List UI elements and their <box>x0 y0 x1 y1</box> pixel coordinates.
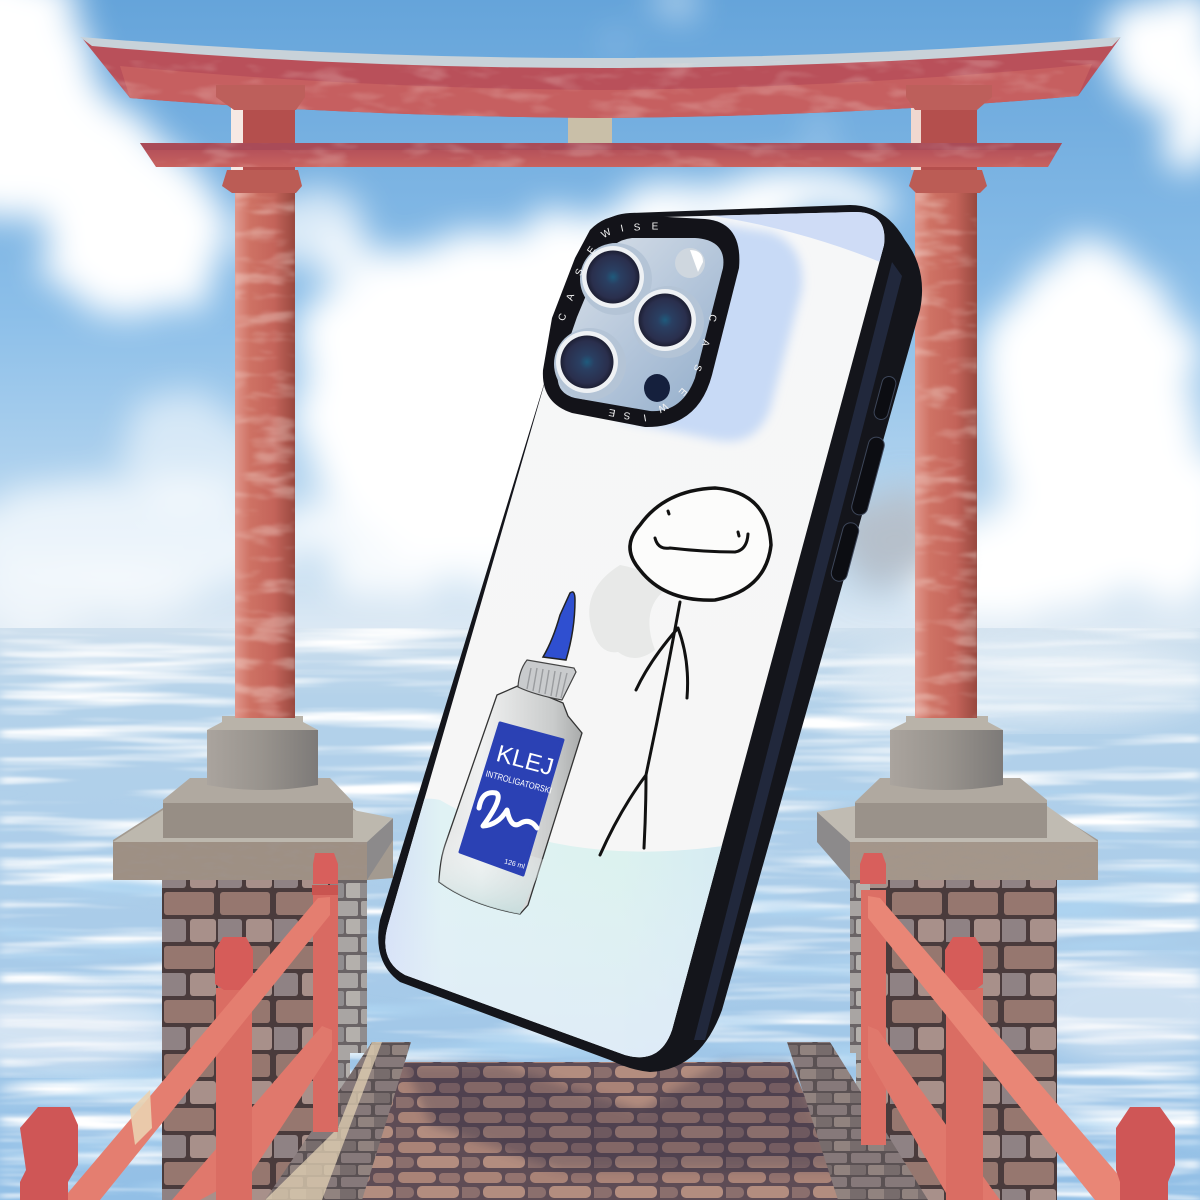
lower beam <box>140 143 1062 167</box>
lower rail <box>172 1026 332 1200</box>
side reflection <box>694 262 902 1040</box>
camera ring <box>543 215 739 427</box>
central strut <box>568 105 612 143</box>
torii gate <box>80 37 1121 718</box>
camera glass <box>558 238 723 411</box>
right brick wall <box>868 878 1057 1200</box>
right railing <box>860 853 1175 1200</box>
phone case <box>360 205 922 1080</box>
stone walkway <box>265 1042 928 1200</box>
brand text top left: W <box>600 226 614 241</box>
pillar brackets <box>216 85 305 110</box>
squiggle <box>479 793 537 828</box>
brand text top left: E <box>585 244 598 256</box>
camera module <box>543 215 739 427</box>
sea <box>0 628 1200 1200</box>
brand text bottom right: E <box>676 385 689 398</box>
label text: INTROLIGATORSKI <box>485 768 553 796</box>
cap <box>518 660 576 700</box>
right drum <box>890 730 1003 790</box>
sky <box>0 0 1200 630</box>
left curb <box>265 1042 411 1200</box>
right stone pier <box>817 716 1098 1200</box>
phone shadow on cobbles <box>405 1062 840 1170</box>
lens right <box>632 286 704 358</box>
middle post <box>946 988 983 1200</box>
brand text bottom right: I <box>643 411 647 423</box>
lower pastel area <box>385 798 722 1058</box>
right ring <box>890 716 1003 730</box>
body and limbs <box>600 602 688 855</box>
right plinth <box>855 778 1047 838</box>
face <box>655 511 748 552</box>
brand text bottom right: S <box>623 409 631 421</box>
left ring <box>207 716 318 730</box>
lidar sensor <box>644 374 670 402</box>
left stone pier <box>113 716 393 1200</box>
brand text top left: S <box>633 222 641 234</box>
camera bump shadow <box>620 220 802 441</box>
lintel top edge <box>80 37 1121 68</box>
left railing <box>20 853 338 1200</box>
label <box>460 723 563 875</box>
right pillar <box>915 100 977 718</box>
left plinth <box>163 778 353 838</box>
brand text top left: C <box>557 312 569 322</box>
brand text bottom right: S <box>691 363 703 373</box>
lower rail <box>868 1026 1000 1200</box>
label text: KLEJ <box>493 740 556 781</box>
flash <box>675 248 705 278</box>
case body <box>378 205 922 1072</box>
brand text top left: A <box>565 292 577 302</box>
lens bottom <box>554 328 626 400</box>
left drum <box>207 730 318 790</box>
right slab <box>817 808 1098 880</box>
top rail <box>62 897 330 1200</box>
brand text top left: I <box>620 223 625 235</box>
top lintel <box>82 38 1120 118</box>
lintel wear marks <box>80 60 1120 170</box>
brand text bottom right <box>608 313 718 423</box>
top light band <box>710 212 884 262</box>
glue bottle <box>439 592 582 914</box>
left pillar <box>235 100 295 718</box>
lens top <box>580 243 652 315</box>
front post <box>20 1107 78 1200</box>
stick figure <box>600 488 771 855</box>
brand text bottom right: W <box>655 400 669 415</box>
brand text bottom right: E <box>608 406 616 418</box>
brand text top left: S <box>574 267 586 278</box>
middle post <box>216 988 252 1200</box>
nozzle <box>543 592 575 660</box>
cobbles <box>335 1062 850 1200</box>
right curb <box>787 1042 928 1200</box>
label text: 126 ml <box>503 858 526 871</box>
label text <box>485 740 556 871</box>
front post <box>1116 1107 1175 1200</box>
body <box>439 685 582 914</box>
brand text top left <box>557 222 659 322</box>
clouds <box>0 0 1200 630</box>
top rail <box>868 896 1140 1200</box>
brand text bottom right: C <box>706 313 718 323</box>
side buttons <box>830 375 897 583</box>
brand text bottom right: A <box>699 338 711 348</box>
faint apple logo <box>589 565 665 658</box>
left slab <box>113 808 393 880</box>
back panel <box>385 212 884 1057</box>
pillar collars <box>222 170 302 193</box>
brand text top left: E <box>652 222 659 232</box>
head <box>630 488 771 600</box>
left brick wall <box>162 878 340 1200</box>
back post <box>861 890 886 1145</box>
back post <box>313 890 338 1132</box>
